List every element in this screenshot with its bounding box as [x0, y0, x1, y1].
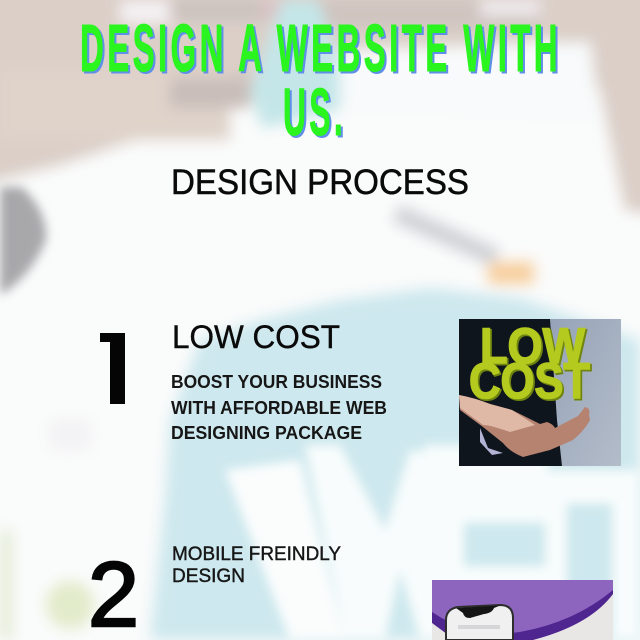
step 2 heading: MOBILE FREINDLY — [172, 544, 341, 565]
step 1 description: WITH AFFORDABLE WEB — [171, 398, 387, 418]
title text: US. — [283, 75, 346, 150]
image: low cost hand — [459, 318, 621, 466]
low cost 3d lettering — [469, 318, 592, 410]
step 2 heading: DESIGN — [172, 566, 245, 587]
step 1 description: BOOST YOUR BUSINESS — [171, 372, 382, 392]
title shadow — [82, 13, 563, 152]
step 1 heading: LOW COST — [172, 319, 340, 355]
low cost 3d lettering: LOW — [482, 320, 587, 376]
heading: design process: DESIGN PROCESS — [171, 162, 469, 202]
hand — [459, 395, 590, 457]
image: mobile phone on purple — [432, 580, 613, 640]
low cost 3d lettering: COST — [469, 353, 590, 409]
title shadow: US. — [285, 77, 348, 152]
step 2 heading — [172, 544, 341, 587]
title text — [80, 11, 561, 150]
title — [80, 11, 563, 152]
step 1 description — [171, 372, 387, 443]
phone — [446, 605, 513, 640]
low cost 3d lettering: LOW — [480, 318, 586, 374]
step 1 description: DESIGNING PACKAGE — [171, 423, 362, 443]
low cost 3d lettering: COST — [470, 354, 592, 410]
number 1 — [100, 333, 125, 404]
